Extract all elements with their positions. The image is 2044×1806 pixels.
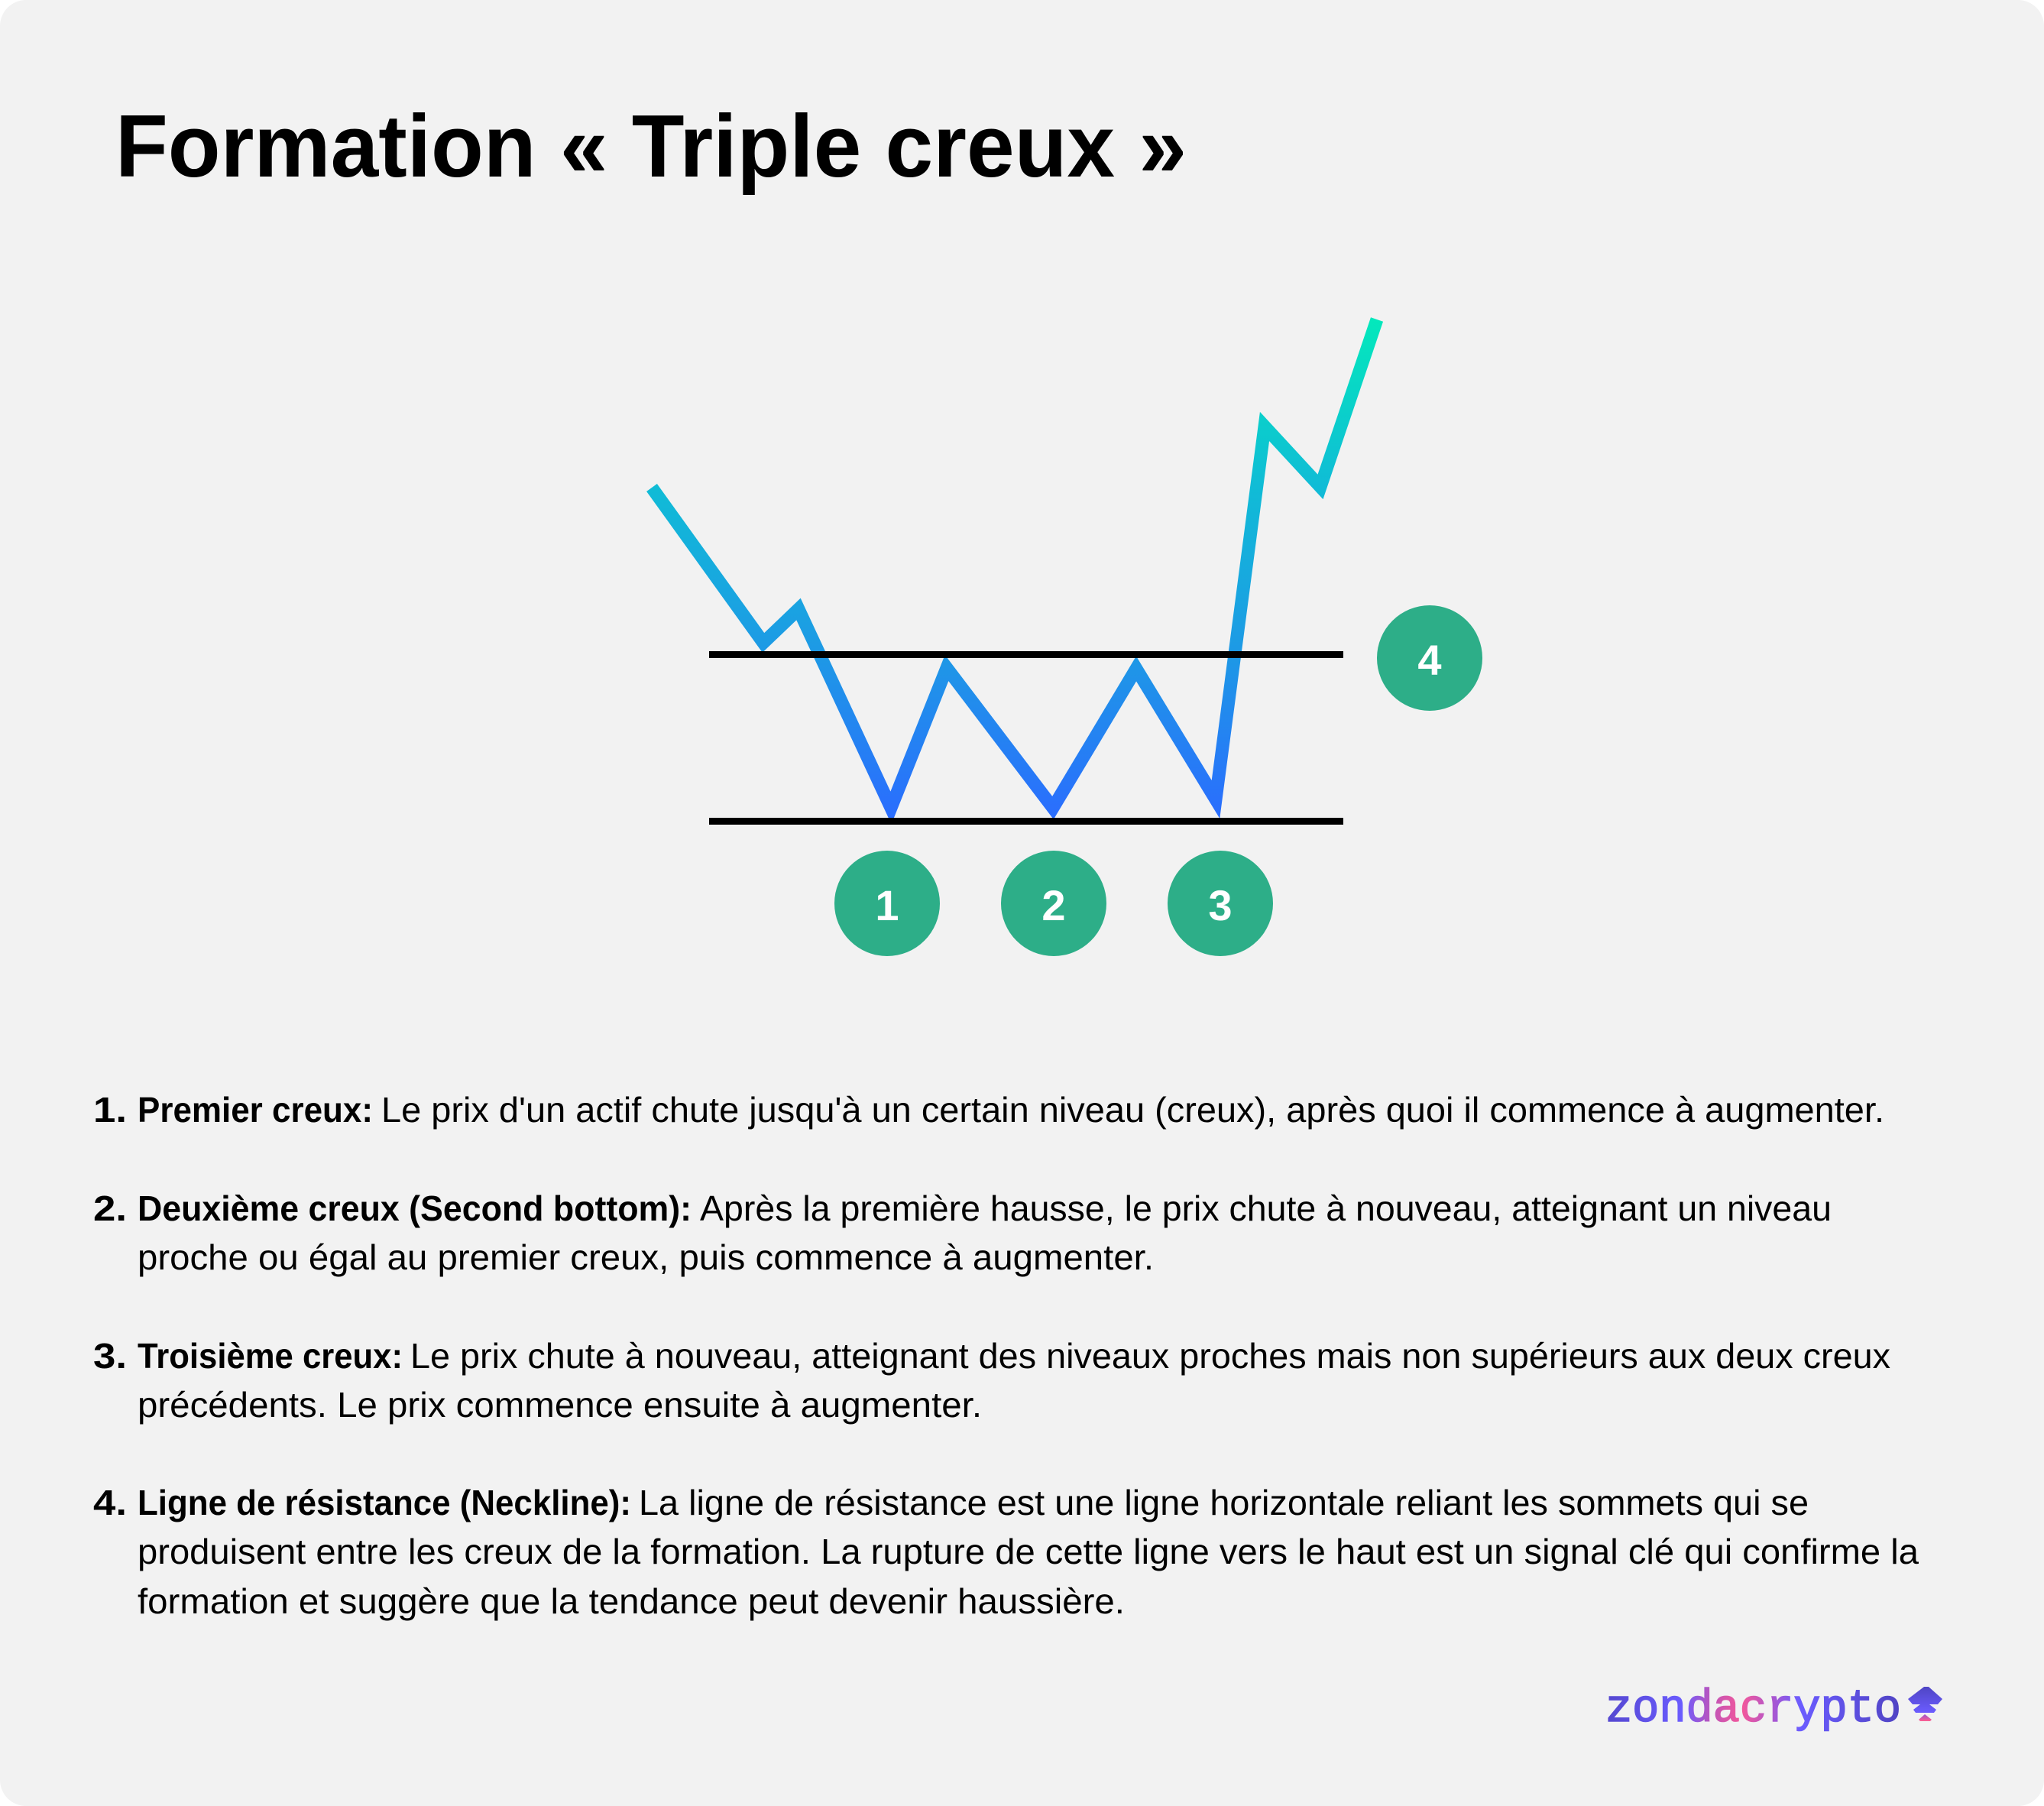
logo: zondacrypto <box>1605 1684 1942 1736</box>
resistance line <box>709 651 1343 658</box>
marker 3: 3 <box>1208 881 1233 929</box>
marker 3 <box>1168 851 1273 956</box>
list item 3: troisième creux: Le prix chute à nouveau, atteignant des niveaux proches mais non supérieurs aux deux creux <box>410 1336 1890 1376</box>
list item 4: ligne de résistance: 4. <box>93 1483 127 1522</box>
marker 1: 1 <box>875 881 899 929</box>
support line <box>709 818 1343 825</box>
marker 1 <box>834 851 940 956</box>
marker 4 <box>1377 605 1482 711</box>
marker 2 <box>1001 851 1106 956</box>
list item 1: premier creux: Premier creux: <box>138 1090 373 1130</box>
chart: triple bottom pattern <box>652 319 1377 825</box>
list item 3: troisième creux: précédents. Le prix commence ensuite à augmenter. <box>138 1385 982 1425</box>
list item 4: ligne de résistance: La ligne de résistance est une ligne horizontale reliant les sommets qui se <box>639 1483 1809 1522</box>
list item 3: troisième creux: 3. <box>93 1336 127 1376</box>
list item 2: deuxième creux: Deuxième creux (Second bottom): <box>138 1188 692 1228</box>
list item 4: ligne de résistance <box>93 1483 1919 1621</box>
list item 2: deuxième creux: Après la première hausse, le prix chute à nouveau, atteignant un niveau <box>700 1188 1832 1228</box>
list item 2: deuxième creux: proche ou égal au premier creux, puis commence à augmenter. <box>138 1237 1154 1277</box>
list item 2: deuxième creux <box>93 1188 1832 1277</box>
marker 2: 2 <box>1041 881 1066 929</box>
list item 1: premier creux: Le prix d'un actif chute jusqu'à un certain niveau (creux), après quoi il commence à augmenter. <box>381 1090 1884 1130</box>
title: Formation « Triple creux » <box>115 96 1187 196</box>
icon: rocket mark <box>1908 1687 1942 1721</box>
list item 3: troisième creux <box>93 1336 1890 1425</box>
list item 4: ligne de résistance: Ligne de résistance (Neckline): <box>138 1483 631 1522</box>
wordmark: zondacrypto <box>1605 1684 1901 1736</box>
list item 3: troisième creux: Troisième creux: <box>138 1336 403 1376</box>
list item 4: ligne de résistance: formation et suggère que la tendance peut devenir haussière. <box>138 1581 1125 1621</box>
list item 4: ligne de résistance: produisent entre les creux de la formation. La rupture de cette ligne vers le haut est un signal clé qui confirme la <box>138 1532 1919 1571</box>
list item 2: deuxième creux: 2. <box>93 1188 127 1228</box>
marker 4: 4 <box>1417 636 1442 684</box>
list item 1: premier creux: 1. <box>93 1090 127 1130</box>
price line <box>652 319 1377 808</box>
